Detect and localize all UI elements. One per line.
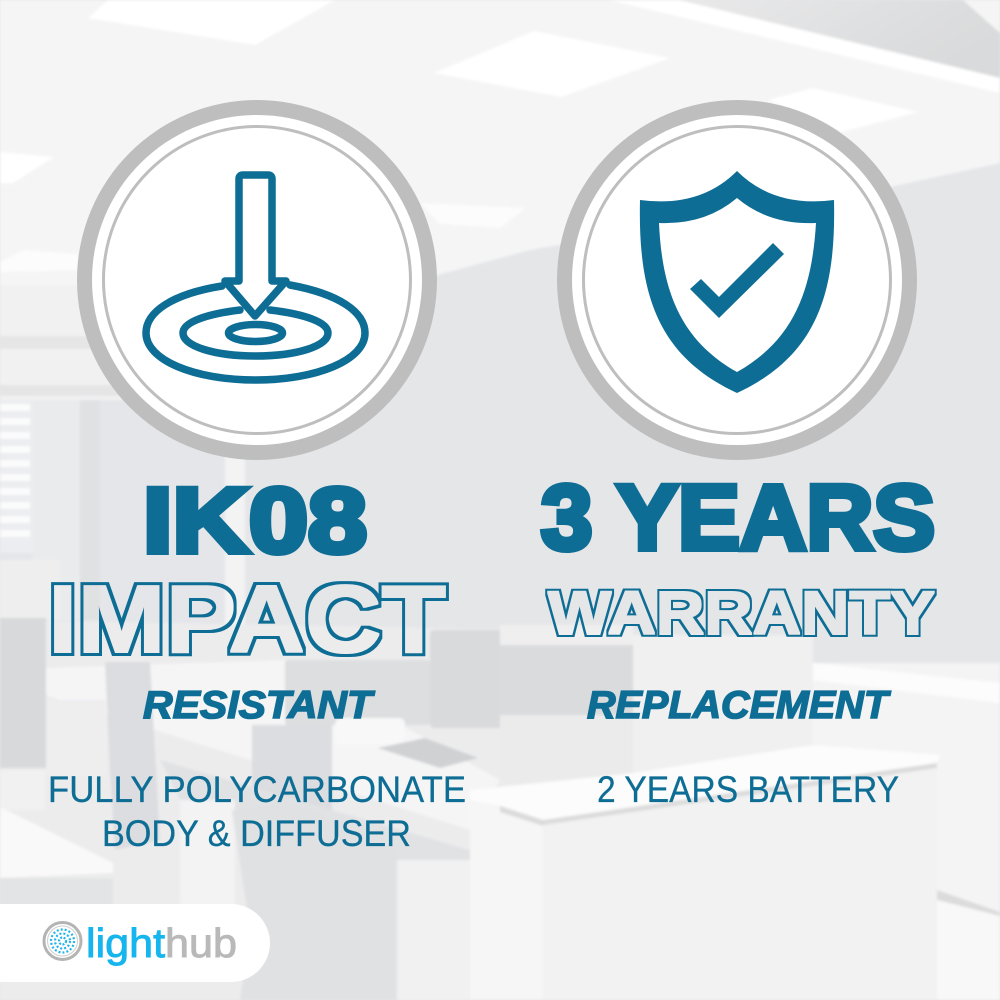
- heading: IK08: IK08: [143, 470, 367, 572]
- logo wordmark: lighthub: [86, 920, 237, 966]
- heading: WARRANTY outline: WARRANTY: [548, 579, 935, 647]
- heading: IMPACT outline: IMPACT: [48, 566, 446, 673]
- subheading: RESISTANT: RESISTANT: [143, 684, 375, 727]
- far desks: [0, 620, 1000, 1000]
- icon: logo mark: [44, 922, 81, 960]
- text block: battery warranty: 2 YEARS BATTERY: [597, 768, 899, 810]
- ceiling: [0, 0, 1000, 285]
- icon badge: warranty: [557, 100, 917, 460]
- left wall and window: [0, 285, 240, 400]
- icon: arrow striking target: [146, 175, 365, 380]
- text block: material description: FULLY POLYCARBONATE: [48, 768, 466, 810]
- subheading: REPLACEMENT: REPLACEMENT: [587, 684, 891, 727]
- icon badge: impact: [77, 100, 437, 460]
- text block: material description: BODY & DIFFUSER: [102, 812, 411, 854]
- chairs and monitors: [105, 662, 160, 850]
- logo: lighthub: [0, 904, 270, 982]
- text block: material description: [48, 768, 466, 854]
- right wall desks and printer: [813, 663, 1000, 1000]
- icon: shield with check: [640, 171, 834, 393]
- heading: 3 YEARS: 3 YEARS: [541, 467, 935, 569]
